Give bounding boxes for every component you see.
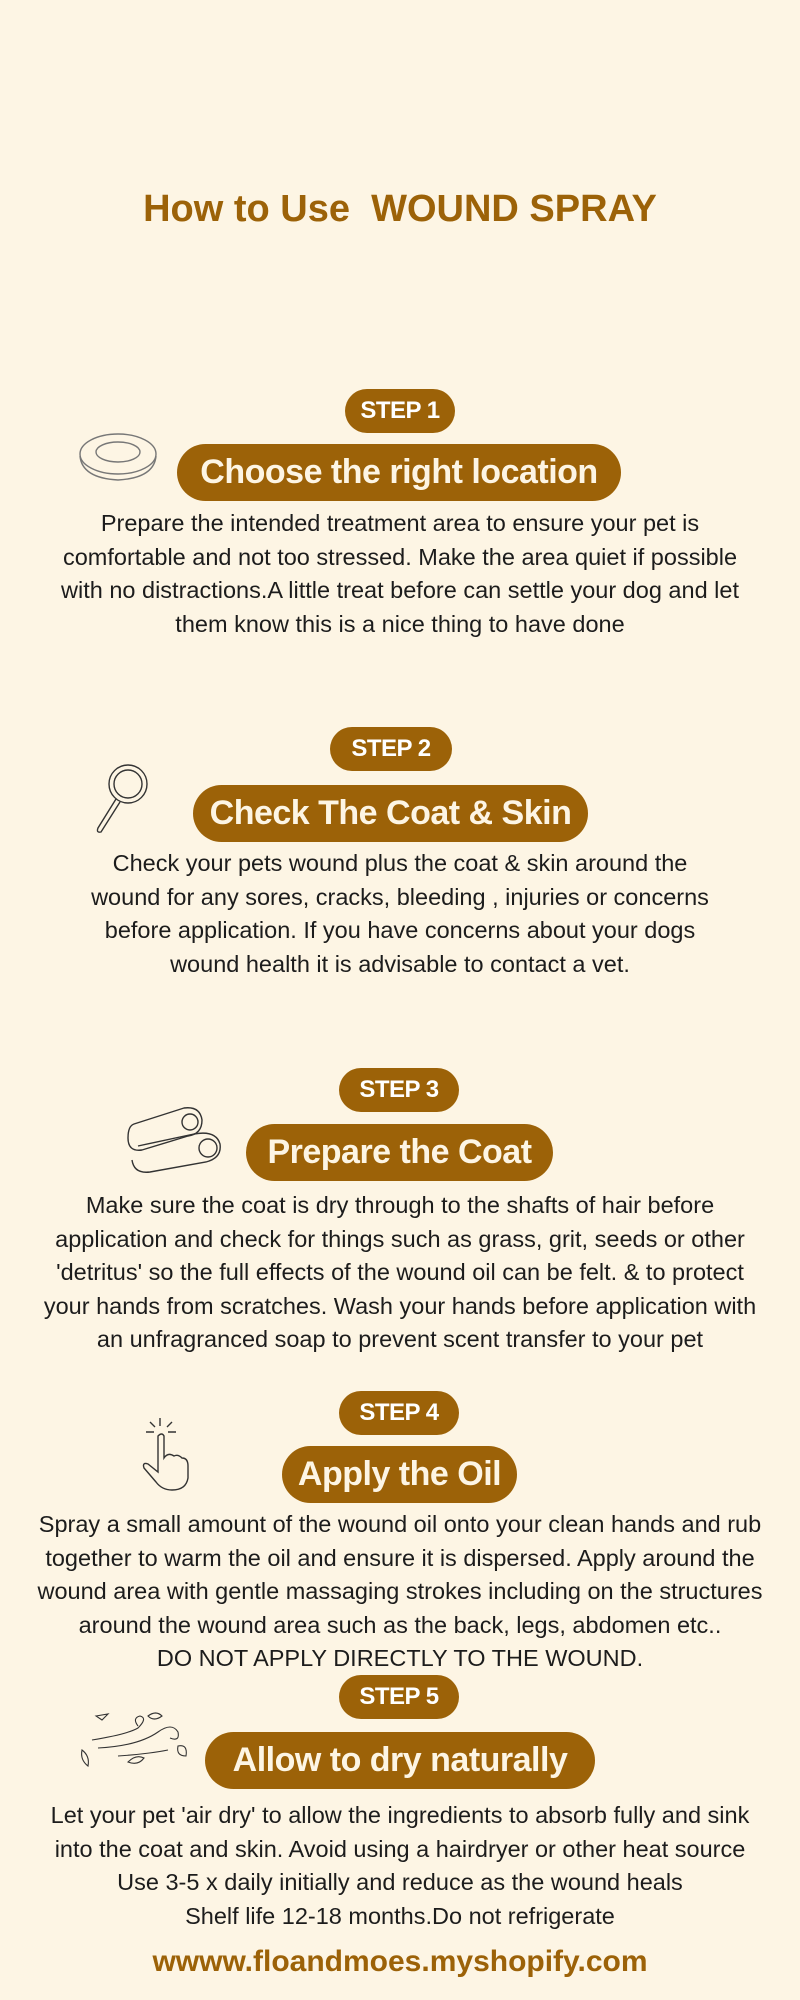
step 2 label: STEP 2 <box>351 735 431 762</box>
text: step 4: together to warm the oil and ensure it is dispersed. Apply around the <box>45 1544 755 1570</box>
text: step 4: DO NOT APPLY DIRECTLY TO THE WOUND. <box>157 1645 643 1671</box>
text: step 3: your hands from scratches. Wash your hands before application with <box>44 1292 756 1318</box>
icon: pointing hand <box>142 1418 189 1491</box>
text: step 5 <box>51 1802 750 1929</box>
text: step 4: Spray a small amount of the wound oil onto your clean hands and rub <box>39 1511 761 1537</box>
heading: allow to dry naturally: Allow to dry naturally <box>233 1741 567 1779</box>
text: step 3: an unfragranced soap to prevent scent transfer to your pet <box>97 1326 703 1352</box>
icon: towels <box>127 1107 221 1173</box>
text: step 2: Check your pets wound plus the coat & skin around the <box>113 850 687 876</box>
text: step 3: application and check for things such as grass, grit, seeds or other <box>55 1226 745 1252</box>
step 1 label <box>345 389 455 433</box>
footer website: wwww.floandmoes.myshopify.com <box>152 1945 648 1978</box>
text: step 5: Shelf life 12-18 months.Do not refrigerate <box>185 1902 615 1928</box>
step 1 label: STEP 1 <box>360 397 440 424</box>
heading: apply the oil: Apply the Oil <box>298 1455 501 1493</box>
text: step 1: with no distractions.A little treat before can settle your dog and let <box>61 577 739 603</box>
icon: magnifier <box>96 764 148 833</box>
heading: apply the oil <box>282 1446 517 1503</box>
text: step 4: around the wound area such as the back, legs, abdomen etc.. <box>79 1612 721 1638</box>
step 4 label: STEP 4 <box>359 1399 439 1426</box>
step 3 label: STEP 3 <box>359 1076 439 1103</box>
title: How to Use WOUND SPRAY <box>143 188 657 230</box>
heading: prepare the coat: Prepare the Coat <box>267 1133 532 1171</box>
text: step 1: comfortable and not too stressed. Make the area quiet if possible <box>63 544 737 570</box>
heading: choose the right location <box>177 444 621 501</box>
text: step 3: 'detritus' so the full effects of the wound oil can be felt. & to protect <box>56 1259 744 1285</box>
text: step 3: Make sure the coat is dry through to the shafts of hair before <box>86 1192 714 1218</box>
text: step 2: wound health it is advisable to contact a vet. <box>170 950 630 976</box>
icon: pet bed <box>79 433 157 481</box>
heading: allow to dry naturally <box>205 1732 595 1789</box>
text: step 5: Use 3-5 x daily initially and reduce as the wound heals <box>117 1869 683 1895</box>
text: step 4: wound area with gentle massaging strokes including on the structures <box>38 1578 762 1604</box>
text: step 1: them know this is a nice thing to have done <box>175 610 625 636</box>
step 5 label: STEP 5 <box>359 1683 439 1710</box>
text: step 1 <box>61 510 739 637</box>
text: step 3 <box>44 1192 756 1352</box>
text: step 1: Prepare the intended treatment area to ensure your pet is <box>101 510 699 536</box>
text: step 4 <box>38 1511 762 1671</box>
step 4 label <box>339 1391 459 1435</box>
text: step 5: Let your pet 'air dry' to allow the ingredients to absorb fully and sink <box>51 1802 749 1828</box>
text: step 2: before application. If you have concerns about your dogs <box>105 917 695 943</box>
step 2 label <box>330 727 452 771</box>
text: step 2: wound for any sores, cracks, bleeding , injuries or concerns <box>91 884 709 910</box>
heading: prepare the coat <box>246 1124 553 1181</box>
text: step 2 <box>91 850 709 976</box>
text: step 5: into the coat and skin. Avoid using a hairdryer or other heat source <box>55 1836 745 1862</box>
heading: check the coat & skin: Check The Coat & Skin <box>210 794 571 832</box>
heading: check the coat & skin <box>193 785 588 842</box>
step 5 label <box>339 1675 459 1719</box>
icon: wind and leaves <box>81 1712 187 1767</box>
step 3 label <box>339 1068 459 1112</box>
heading: choose the right location: Choose the right location <box>200 453 598 491</box>
